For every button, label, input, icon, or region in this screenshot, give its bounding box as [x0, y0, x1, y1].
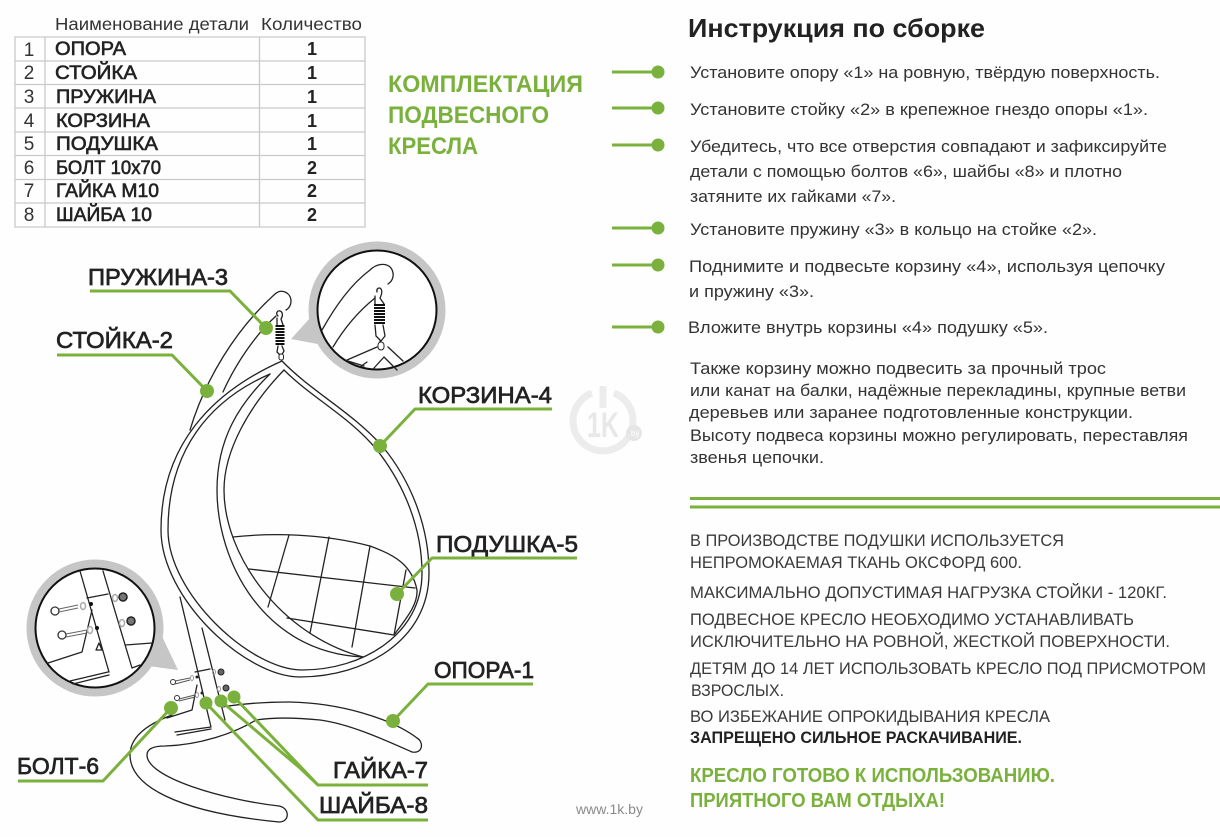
callout: ШАЙБА-8: ШАЙБА-8	[319, 791, 428, 818]
table rows: 6	[24, 158, 34, 179]
callout: ГАЙКА-7: ГАЙКА-7	[333, 756, 428, 783]
heading: chair kit: КОМПЛЕКТАЦИЯ	[388, 71, 583, 98]
heading: chair kit	[388, 71, 583, 160]
step 3	[612, 138, 1167, 206]
heading: chair kit: ПОДВЕСНОГО	[388, 102, 549, 129]
closing message: ПРИЯТНОГО ВАМ ОТДЫХА!	[690, 790, 945, 812]
table header: Наименование детали	[55, 14, 249, 34]
site credit: www.1k.by	[575, 801, 643, 817]
chair drawing	[130, 291, 429, 822]
table rows: ОПОРА	[55, 39, 126, 60]
watermark logo	[573, 386, 642, 451]
callout: СТОЙКА-2: СТОЙКА-2	[56, 326, 173, 353]
callout: ГАЙКА-7	[214, 690, 428, 785]
table rows: 1	[307, 63, 317, 83]
callout: ПОДУШКА-5: ПОДУШКА-5	[436, 531, 578, 557]
text block: safety notes: НЕПРОМОКАЕМАЯ ТКАНЬ ОКСФОРД 600.	[690, 554, 1022, 572]
text block: safety notes: ВО ИЗБЕЖАНИЕ ОПРОКИДЫВАНИЯ КРЕСЛА	[690, 708, 1050, 726]
table rows: ПРУЖИНА	[56, 87, 156, 108]
table rows: 1	[24, 40, 34, 61]
table rows	[24, 39, 317, 226]
table rows: 5	[24, 134, 34, 155]
table rows: 7	[24, 181, 34, 202]
step 6: Вложите внутрь корзины «4» подушку «5».	[688, 319, 1048, 337]
table rows: СТОЙКА	[55, 62, 137, 84]
callout: СТОЙКА-2	[56, 326, 214, 398]
table rows: ШАЙБА 10	[56, 204, 152, 226]
step 2: Установите стойку «2» в крепежное гнездо опоры «1».	[690, 101, 1148, 119]
text block: safety notes: МАКСИМАЛЬНО ДОПУСТИМАЯ НАГРУЗКА СТОЙКИ - 120КГ.	[690, 583, 1167, 602]
text block: hanging alternative	[689, 360, 1188, 467]
table rows: 8	[24, 205, 34, 226]
text block: hanging alternative: Высоту подвеса корзины можно регулировать, переставляя	[690, 427, 1188, 445]
step 5: Поднимите и подвесьте корзину «4», используя цепочку	[689, 258, 1166, 276]
callout: ОПОРА-1: ОПОРА-1	[434, 657, 534, 683]
basket	[161, 361, 429, 677]
text block: safety notes: ИСКЛЮЧИТЕЛЬНО НА РОВНОЙ, ЖЕСТКОЙ ПОВЕРХНОСТИ.	[690, 632, 1170, 651]
table rows: 1	[307, 111, 317, 131]
callout: ШАЙБА-8	[200, 696, 428, 820]
text block: safety notes: ЗАПРЕЩЕНО СИЛЬНОЕ РАСКАЧИВАНИЕ.	[690, 729, 1022, 747]
table rows: 1	[307, 87, 317, 107]
callout: ПОДУШКА-5	[390, 531, 578, 601]
text block: hanging alternative: звенья цепочки.	[690, 449, 824, 467]
closing message: КРЕСЛО ГОТОВО К ИСПОЛЬЗОВАНИЮ.	[690, 765, 1055, 787]
magnifier: spring detail	[291, 246, 441, 374]
step 5: и пружину «3».	[689, 283, 814, 301]
table rows: 3	[24, 87, 34, 108]
stand	[167, 291, 291, 735]
closing message	[690, 765, 1055, 812]
text block: hanging alternative: или канат на балки, надёжные перекладины, крупные ветви	[690, 382, 1186, 400]
text block: safety notes	[690, 532, 1206, 747]
base	[130, 702, 421, 822]
table rows: 1	[307, 134, 317, 154]
text block: safety notes: ДЕТЯМ ДО 14 ЛЕТ ИСПОЛЬЗОВАТЬ КРЕСЛО ПОД ПРИСМОТРОМ	[690, 660, 1206, 678]
table rows: 2	[24, 63, 34, 84]
table rows: КОРЗИНА	[56, 111, 150, 132]
table header	[55, 14, 362, 34]
parts table	[15, 14, 365, 227]
callout: КОРЗИНА-4: КОРЗИНА-4	[418, 382, 552, 408]
table rows: ГАЙКА М10	[56, 180, 159, 202]
heading: chair kit: КРЕСЛА	[388, 133, 478, 160]
step 1: Установите опору «1» на ровную, твёрдую поверхность.	[690, 64, 1160, 82]
callout: БОЛТ-6	[17, 701, 178, 781]
text block: hanging alternative: деревьев или заранее подготовленные конструкции.	[689, 404, 1133, 422]
callout: ПРУЖИНА-3	[88, 264, 273, 335]
step 5	[612, 258, 1166, 301]
step 4: Установите пружину «3» в кольцо на стойке «2».	[690, 221, 1097, 239]
text block: safety notes: ПОДВЕСНОЕ КРЕСЛО НЕОБХОДИМО УСТАНАВЛИВАТЬ	[690, 611, 1134, 629]
callout: ПРУЖИНА-3: ПРУЖИНА-3	[88, 264, 228, 290]
table rows: 2	[307, 158, 317, 178]
text block: safety notes: ВЗРОСЛЫХ.	[691, 682, 784, 700]
assembly steps	[612, 64, 1167, 337]
callout: БОЛТ-6: БОЛТ-6	[17, 753, 99, 779]
spring and hook	[276, 311, 284, 360]
table header: Количество	[261, 14, 362, 34]
heading: assembly instructions: Инструкция по сборке	[688, 13, 985, 43]
step 3: детали с помощью болтов «6», шайбы «8» и плотно	[690, 163, 1122, 181]
step 3: Убедитесь, что все отверстия совпадают и зафиксируйте	[690, 138, 1167, 156]
magnifier: bolt detail	[31, 564, 178, 692]
text block: hanging alternative: Также корзину можно подвесить за прочный трос	[690, 360, 1106, 378]
small bolts	[170, 669, 229, 701]
callout: ОПОРА-1	[386, 657, 534, 728]
watermark logo: 1K	[587, 406, 619, 445]
cushion	[233, 535, 417, 647]
watermark logo: .by	[629, 429, 639, 438]
table rows: 4	[24, 111, 35, 132]
callout: КОРЗИНА-4	[373, 382, 552, 453]
table rows: 2	[307, 181, 317, 201]
table rows: БОЛТ 10х70	[56, 158, 161, 179]
table rows: ПОДУШКА	[56, 134, 158, 155]
step 3: затяните их гайками «7».	[690, 188, 896, 206]
table rows: 2	[307, 205, 317, 225]
text block: safety notes: В ПРОИЗВОДСТВЕ ПОДУШКИ ИСПОЛЬЗУЕТСЯ	[690, 532, 1064, 550]
table rows: 1	[307, 39, 317, 59]
